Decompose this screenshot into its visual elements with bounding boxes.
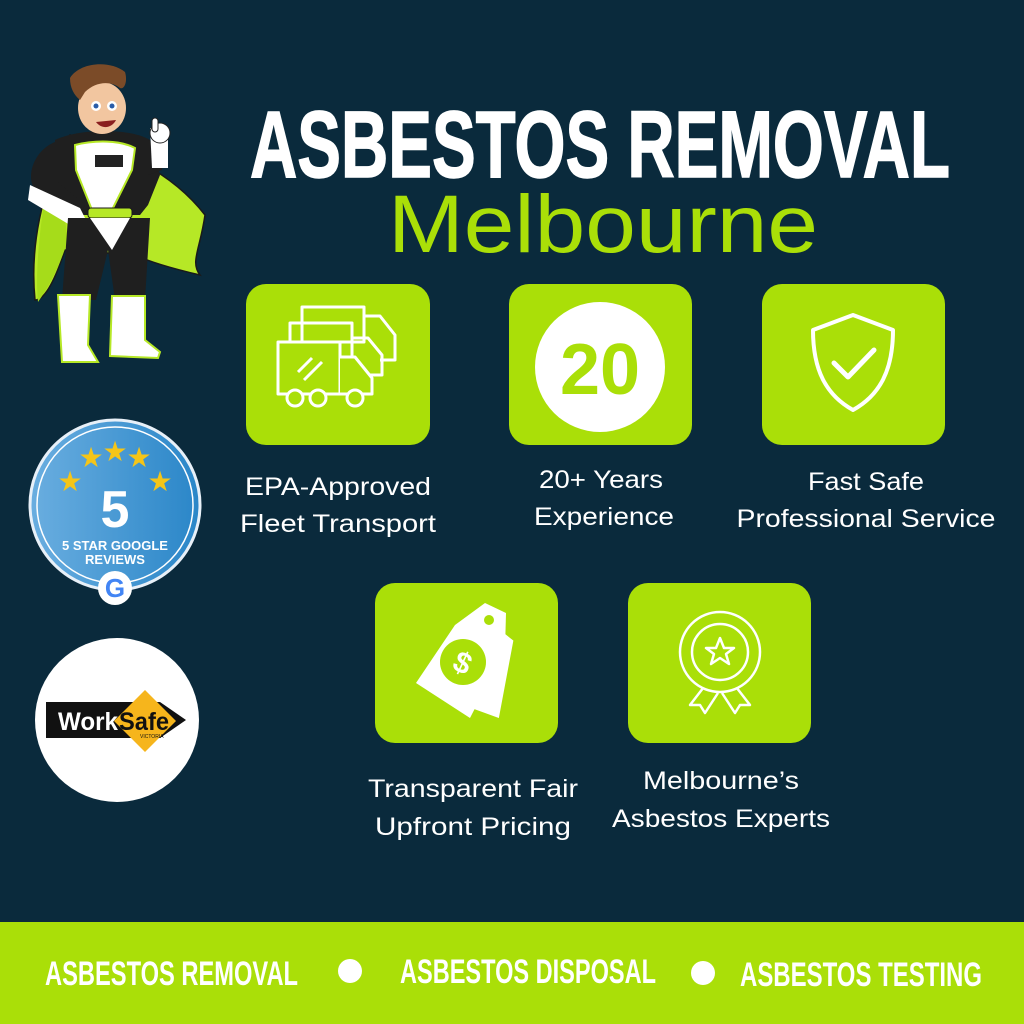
icon: award rosette — [680, 612, 760, 713]
label: fast safe: Fast Safe — [808, 468, 924, 496]
badge: 5 star google reviews: ★ — [126, 442, 152, 473]
badge: 5 star google reviews — [30, 420, 200, 605]
subtitle: Melbourne: Melbourne — [388, 179, 818, 270]
panel: pricing: $ — [448, 645, 477, 682]
label: pricing: Transparent Fair — [368, 775, 578, 803]
icon: trucks — [278, 307, 395, 406]
label: 20 years: Experience — [534, 503, 674, 531]
panel: 20 years: 20 — [560, 330, 640, 410]
badge: WorkSafe Victoria: VICTORIA — [140, 734, 164, 740]
cape left flap — [37, 195, 68, 302]
label: EPA fleet: Fleet Transport — [240, 510, 436, 538]
cape — [34, 135, 205, 300]
label: fast safe — [736, 468, 996, 533]
mascot: superhero character — [28, 64, 205, 362]
icon: 20 circle — [535, 302, 665, 432]
label: experts: Melbourne’s — [643, 767, 799, 795]
left arm — [31, 142, 85, 215]
panel: 20 years — [509, 284, 692, 445]
panel: fast safe — [762, 284, 945, 445]
badge: 5 star google reviews: ★ — [78, 442, 104, 473]
boots — [58, 295, 98, 362]
label: experts — [612, 767, 830, 833]
label: experts: Asbestos Experts — [612, 805, 830, 833]
right arm thumb up — [148, 140, 163, 175]
footer band: services — [0, 922, 1024, 1024]
footer band: services: ASBESTOS REMOVAL — [45, 955, 298, 993]
label: pricing: Upfront Pricing — [375, 813, 571, 841]
panel: EPA fleet — [246, 284, 430, 445]
logo on chest — [95, 155, 123, 167]
legs — [62, 218, 150, 300]
label: pricing — [368, 775, 578, 841]
footer band: services: ASBESTOS DISPOSAL — [400, 953, 656, 991]
head — [78, 82, 126, 134]
badge: 5 star google reviews: G — [105, 573, 125, 603]
badge: WorkSafe Victoria — [35, 638, 199, 802]
badge: 5 star google reviews: REVIEWS — [85, 552, 145, 567]
label: EPA fleet: EPA-Approved — [245, 473, 431, 501]
torso — [55, 131, 160, 215]
label: EPA fleet — [240, 473, 436, 538]
badge: 5 star google reviews: ★ — [57, 466, 83, 497]
badge: 5 star google reviews: 5 — [101, 481, 129, 539]
icon: price tags — [445, 632, 515, 720]
label: fast safe: Professional Service — [736, 505, 996, 533]
icon: shield check — [813, 315, 893, 410]
badge: WorkSafe Victoria: Work — [58, 708, 118, 736]
chest plate — [75, 142, 135, 210]
badge: 5 star google reviews: ★ — [102, 436, 128, 467]
label: 20 years: 20+ Years — [539, 466, 663, 494]
panel: pricing — [375, 583, 558, 743]
panel: experts — [628, 583, 811, 743]
badge: 5 star google reviews: 5 STAR GOOGLE — [62, 538, 168, 553]
label: 20 years — [534, 466, 674, 531]
badge: WorkSafe Victoria: Safe — [119, 708, 169, 736]
belt — [88, 208, 132, 218]
badge: 5 star google reviews: ★ — [147, 466, 173, 497]
